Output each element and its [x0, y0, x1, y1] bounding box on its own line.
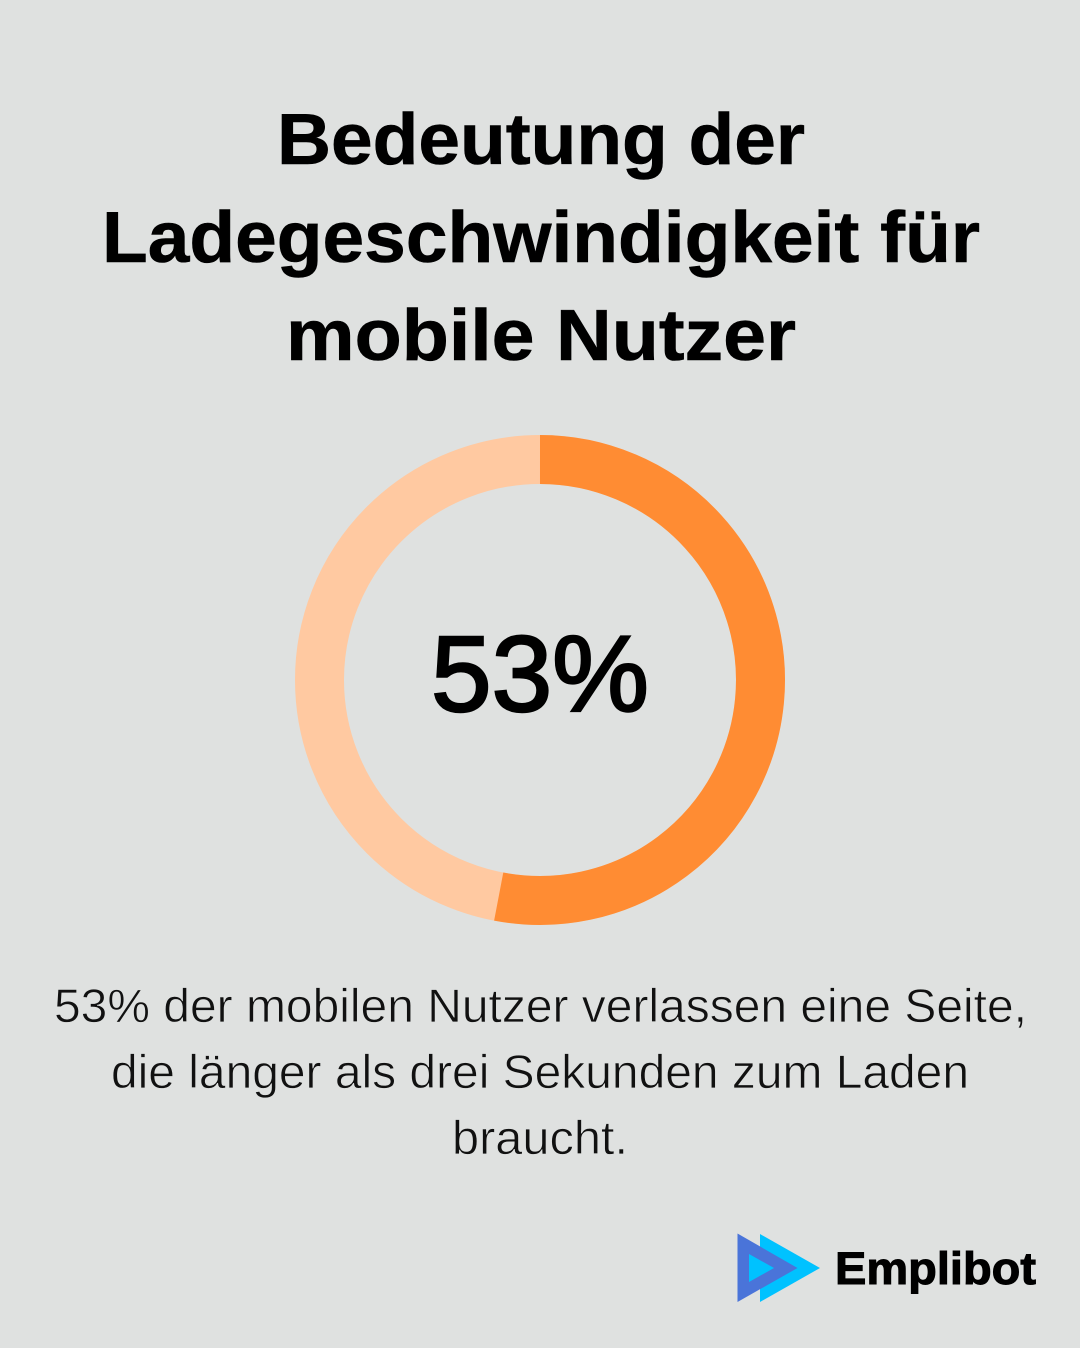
title: mobile Nutzer — [286, 296, 796, 376]
description text: 53% der mobilen Nutzer verlassen eine Seite, — [54, 979, 1027, 1032]
donut chart: 53% — [320, 460, 760, 900]
description text: die länger als drei Sekunden zum Laden — [111, 1045, 969, 1098]
title: Bedeutung der — [277, 100, 805, 180]
logo wordmark: Emplibot — [835, 1243, 1036, 1294]
title — [102, 100, 980, 376]
title: Ladegeschwindigkeit für — [102, 198, 980, 278]
description text — [54, 979, 1027, 1164]
logo: Emplibot — [738, 1234, 1036, 1302]
icon: play triangles — [738, 1234, 820, 1302]
donut value: 53% — [431, 613, 649, 734]
description text: braucht. — [452, 1111, 628, 1164]
